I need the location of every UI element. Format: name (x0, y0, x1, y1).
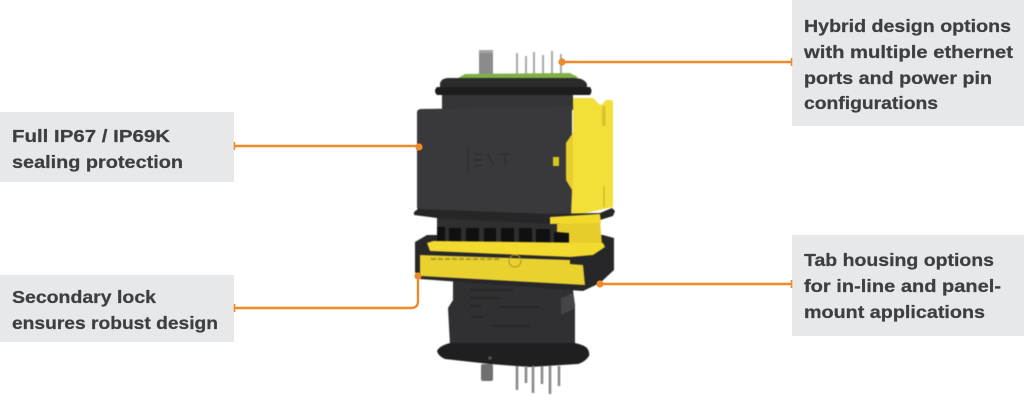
embossed logo on housing (468, 148, 510, 172)
green seal top (458, 73, 578, 81)
yellow secondary lock (420, 241, 605, 285)
panel: secondary lock callout: ensures robust design (12, 313, 218, 333)
upper flange (414, 208, 615, 224)
panel: IP67 sealing callout (0, 112, 234, 182)
arrow: hybrid design leader (558, 58, 792, 66)
top cap and seal ring (435, 78, 592, 110)
panel: hybrid design callout: configurations (804, 93, 938, 113)
ribbed comb section (437, 217, 602, 246)
plug label marking (470, 290, 538, 326)
panel: secondary lock callout (0, 275, 234, 342)
arrow: secondary lock leader (234, 272, 422, 312)
panel: hybrid design callout: Hybrid design options (804, 16, 1011, 36)
bottom pins (481, 364, 559, 394)
panel: secondary lock callout: Secondary lock (12, 287, 156, 307)
connector illustration (414, 50, 615, 394)
panel: hybrid design callout: with multiple ethernet (803, 42, 1013, 62)
main housing (417, 107, 572, 216)
panel: tab housing callout: Tab housing options (804, 250, 994, 270)
tiny housing marking (431, 255, 521, 267)
lower plug body (437, 281, 589, 367)
panel: hybrid design callout: ports and power pin (804, 68, 992, 88)
panel: hybrid design callout (792, 0, 1024, 126)
yellow latch (553, 98, 613, 216)
top pins (479, 50, 561, 75)
arrow: sealing leader (234, 142, 423, 151)
panel: IP67 sealing callout: Full IP67 / IP69K (12, 126, 170, 146)
panel: IP67 sealing callout: sealing protection (12, 152, 183, 172)
arrow: tab housing leader (596, 280, 792, 288)
panel: tab housing callout: for in-line and panel- (804, 276, 1001, 296)
lower flange (415, 235, 614, 291)
panel: tab housing callout: mount applications (804, 302, 985, 322)
panel: tab housing callout (792, 235, 1024, 336)
